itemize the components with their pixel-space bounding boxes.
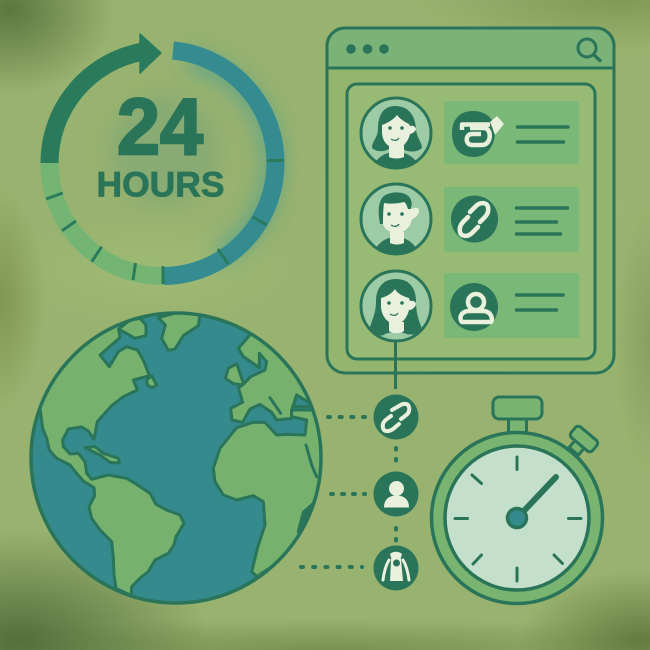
- icon: person: [450, 283, 498, 331]
- avatar: man: [361, 184, 431, 258]
- label HOURS: HOURS: [96, 166, 224, 204]
- ring: light green arc: [50, 163, 163, 276]
- land: Baffin: [119, 318, 146, 338]
- icon: search: [578, 39, 600, 60]
- land: Newfoundland: [147, 376, 157, 388]
- land: Caribbean: [85, 447, 119, 463]
- ring: teal arc: [164, 50, 276, 276]
- ring ticks: [46, 160, 284, 284]
- ring glow: [110, 60, 273, 255]
- row 1 card: [444, 101, 579, 164]
- hub: [508, 508, 526, 528]
- row 2 card: [444, 187, 579, 252]
- inner panel: [347, 84, 595, 359]
- stopwatch: [432, 397, 602, 604]
- land: Greenland: [158, 312, 200, 350]
- big number 24: 24: [117, 82, 203, 171]
- dotted connectors: [301, 417, 396, 567]
- icon: figure node: [374, 546, 418, 590]
- land: Britain: [225, 364, 244, 385]
- side button: [563, 425, 599, 460]
- hour ticks: [455, 457, 581, 581]
- avatar: woman 2: [361, 271, 431, 341]
- dial face: [445, 446, 589, 590]
- ring: dark arc with arrow: [49, 34, 161, 163]
- icon: link node: [374, 394, 418, 440]
- Madagascar: [298, 503, 313, 532]
- row 3 card: [444, 273, 579, 338]
- icon: trumpet: [452, 111, 504, 157]
- case: [432, 432, 602, 604]
- clock hand: [520, 477, 556, 515]
- title bar: [327, 28, 614, 68]
- connector line: [394, 340, 397, 389]
- land: Americas: [40, 326, 186, 594]
- avatar: woman 1: [361, 98, 431, 170]
- land: Africa and Arabia: [212, 408, 320, 578]
- 24 hours ring: [46, 34, 284, 284]
- land: Eurasia: [229, 334, 307, 424]
- crown: [493, 397, 542, 434]
- browser window: [327, 28, 614, 389]
- small sea: [293, 395, 310, 407]
- seam lines: [270, 398, 317, 477]
- globe: [17, 308, 337, 603]
- icon: link: [451, 196, 498, 242]
- icon: person node: [374, 472, 418, 516]
